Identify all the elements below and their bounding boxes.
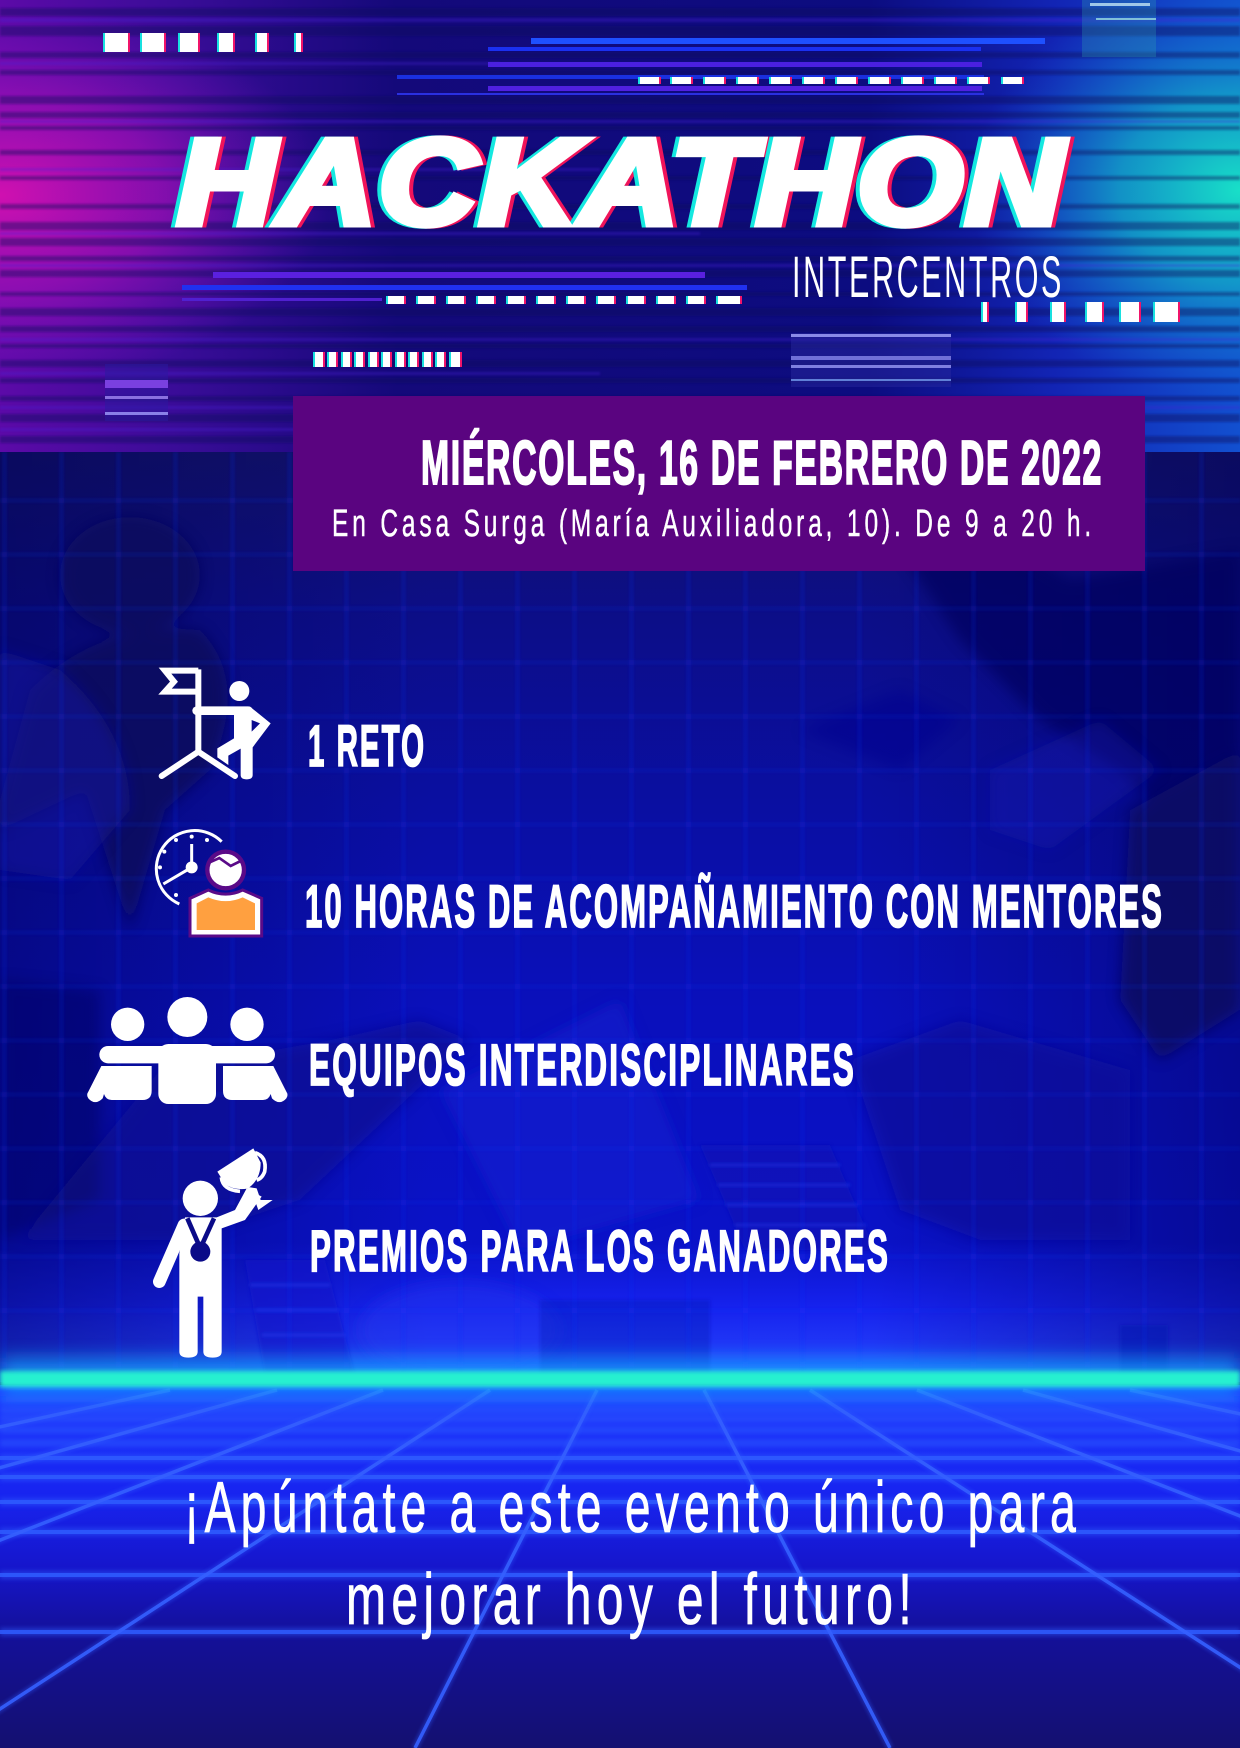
- icon: clock and mentor: [156, 831, 262, 936]
- background: photo with blue tint: [0, 452, 1240, 1382]
- floor grid with perspective lines: [0, 1385, 1240, 1748]
- icon: flag and person: [162, 669, 271, 779]
- label: 1 RETO: [308, 714, 426, 779]
- item: premios: [159, 1148, 890, 1358]
- title: HACKATHON: HACKATHON: [177, 114, 1067, 250]
- call to action: mejorar hoy el futuro!: [346, 1560, 917, 1640]
- item: 10 horas: [156, 831, 1164, 940]
- icon: team: [87, 997, 287, 1104]
- horizon glow line: [0, 1358, 1240, 1396]
- glitch dashes: [103, 33, 1180, 367]
- header banner with glitch stripes: [0, 0, 1240, 452]
- date panel: [293, 396, 1145, 571]
- item: equipos: [87, 997, 856, 1104]
- title: HACKATHON: HACKATHON: [181, 114, 1071, 250]
- title: HACKATHON: HACKATHON: [173, 114, 1063, 250]
- call to action: [184, 1468, 1081, 1640]
- item: 1 reto: [162, 669, 426, 779]
- data panels: [105, 0, 1156, 421]
- keyboards and desk objects: [245, 1145, 1168, 1380]
- blue bars: [182, 38, 1045, 301]
- icon: winner with trophy: [159, 1148, 273, 1358]
